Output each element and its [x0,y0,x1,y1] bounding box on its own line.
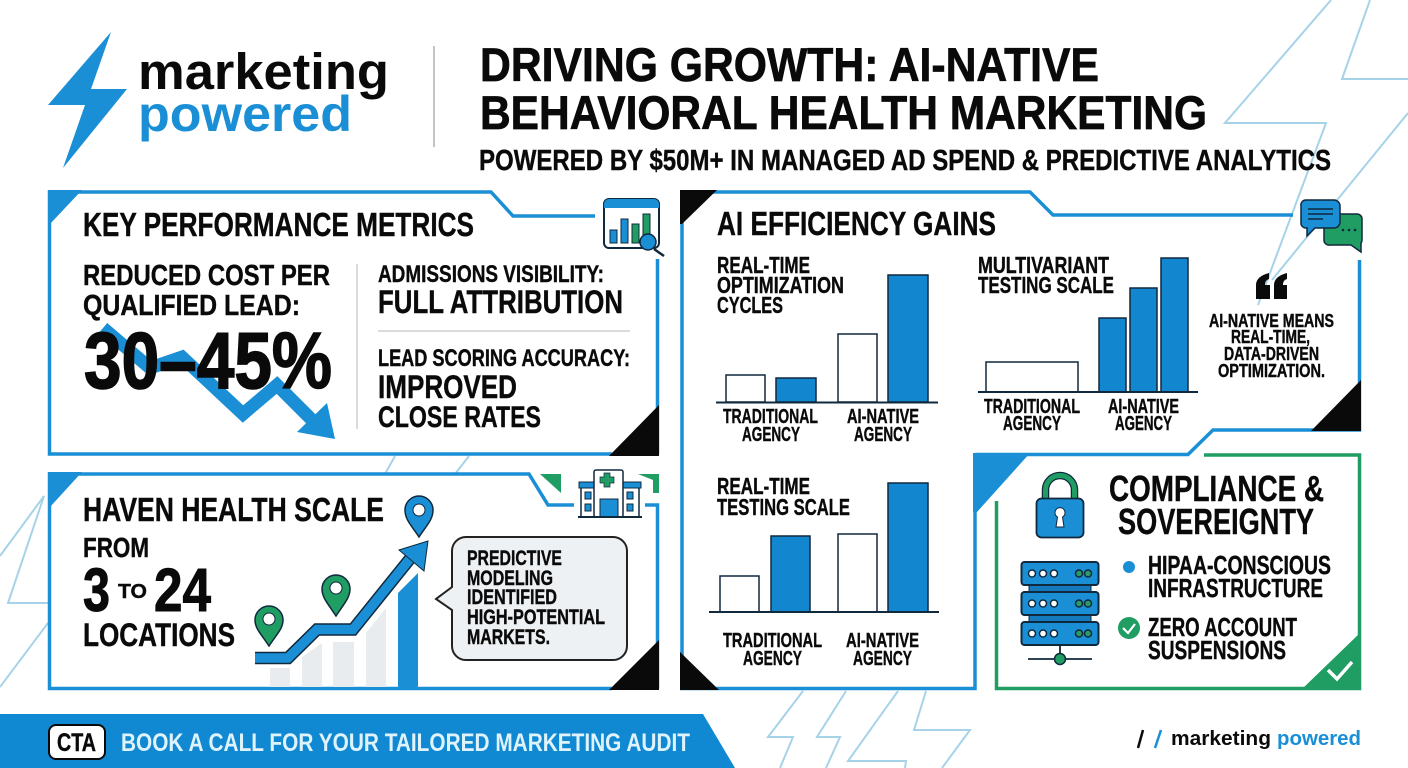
bullet: zero account suspensions: ZERO ACCOUNT [1148,612,1297,642]
chart: real-time testing scale: TESTING SCALE [717,494,850,520]
chart: multivariant testing scale: AGENCY [1115,413,1172,435]
bullet: hipaa-conscious infrastructure [1123,550,1331,603]
stat: from 3 to 24 locations: LOCATIONS [83,617,235,653]
chart: real-time optimization cycles: TRADITIONAL [723,406,818,428]
chart: multivariant testing scale: AI-NATIVE [1108,396,1179,418]
panel: key performance metrics [48,190,664,456]
big number: 30–45% [84,316,332,405]
panel: haven health scale [48,470,659,690]
stat: from 3 to 24 locations: TO [118,581,147,603]
cta badge [49,725,105,759]
chart: real-time optimization cycles: CYCLES [717,292,783,318]
heading: AI EFFICIENCY GAINS [717,205,996,242]
chart: real-time optimization cycles: REAL-TIME [717,252,810,278]
callout: predictive modeling [436,537,627,660]
heading: KEY PERFORMANCE METRICS [83,206,474,243]
icon: lightning bolt [48,32,127,168]
metric: lead scoring accuracy: LEAD SCORING ACCURACY: [378,345,630,372]
chart: real-time testing scale: TRADITIONAL [723,630,822,652]
chart: multivariant testing scale: TESTING SCALE [978,272,1114,298]
stat: from 3 to 24 locations: 24 [154,556,211,624]
chart: real-time testing scale: AI-NATIVE [846,630,919,652]
chart: real-time optimization cycles [716,252,938,446]
metric: admissions visibility [378,261,623,320]
metric: lead scoring accuracy [378,345,630,434]
chart: real-time testing scale: AGENCY [853,648,912,670]
cta badge: CTA [57,729,96,757]
logo [48,32,389,168]
growth chart [255,496,433,687]
chart: real-time optimization cycles: AGENCY [742,424,800,446]
heading: COMPLIANCE & [1109,468,1324,509]
callout: predictive modeling: IDENTIFIED [467,586,557,609]
bullet: hipaa-conscious infrastructure: INFRASTRUCTURE [1148,573,1323,603]
heading: SOVEREIGNTY [1118,501,1314,542]
metric label: reduced cost: REDUCED COST PER [83,260,330,292]
icon: hospital [578,470,642,517]
stat: from 3 to 24 locations: FROM [83,532,149,563]
metric label: reduced cost [83,260,330,322]
icon: server rack [1022,562,1098,664]
footer logo: powered [1277,728,1361,750]
heading [1109,468,1324,542]
heading: HAVEN HEALTH SCALE [83,491,384,528]
logo wordmark: powered: powered [138,86,352,142]
stat: from 3 to 24 locations [83,532,235,653]
icon: blue pin [405,496,433,537]
icon: quotation mark [1256,273,1287,299]
quote [1209,273,1334,381]
call to action bar [0,714,735,768]
icon: chat bubbles [1301,200,1362,252]
title: DRIVING GROWTH: AI-NATIVE [480,39,1099,92]
quote: REAL-TIME, [1231,327,1310,347]
title: BEHAVIORAL HEALTH MARKETING [480,87,1207,140]
chart: multivariant testing scale: AGENCY [1003,413,1061,435]
metric label: reduced cost: QUALIFIED LEAD: [83,290,300,322]
cta text: BOOK A CALL FOR YOUR TAILORED MARKETING AUDIT [121,729,690,757]
chart: real-time optimization cycles: OPTIMIZATION [717,272,844,298]
callout: predictive modeling: MARKETS. [467,626,550,649]
callout: predictive modeling: HIGH-POTENTIAL [467,606,605,629]
icon: padlock [1036,475,1084,538]
chart: real-time testing scale: REAL-TIME [717,473,810,499]
callout: predictive modeling: PREDICTIVE [467,547,562,570]
chart: multivariant testing scale: MULTIVARIANT [978,252,1109,278]
chart: multivariant testing scale [978,252,1198,435]
bullet: zero account suspensions [1118,612,1297,665]
quote: OPTIMIZATION. [1218,361,1325,381]
metric: admissions visibility: ADMISSIONS VISIBILITY: [378,261,604,288]
footer logo [1138,728,1361,750]
metric: lead scoring accuracy: IMPROVED [378,369,517,405]
chart: real-time testing scale: AGENCY [743,648,802,670]
bullet: hipaa-conscious infrastructure: HIPAA-CONSCIOUS [1148,550,1331,580]
panel: ai efficiency gains [680,190,1362,690]
chart: real-time testing scale [709,473,939,670]
chart: real-time optimization cycles: AI-NATIVE [847,406,919,428]
icon: green pin [322,575,350,616]
bullet: zero account suspensions: SUSPENSIONS [1148,635,1286,665]
metric: lead scoring accuracy: CLOSE RATES [378,401,541,434]
chart: real-time optimization cycles: AGENCY [854,424,912,446]
icon: green pin [255,606,283,646]
down trend arrow [103,328,335,439]
quote: AI-NATIVE MEANS [1209,311,1334,331]
panel: compliance and sovereignty [973,453,1361,690]
quote: DATA-DRIVEN [1224,344,1319,364]
chart: multivariant testing scale: TRADITIONAL [984,396,1080,418]
icon: analytics window [604,199,664,256]
title [480,39,1207,140]
logo wordmark: marketing: marketing [138,43,389,100]
callout: predictive modeling: MODELING [467,567,553,590]
stat: from 3 to 24 locations: 3 [83,556,110,624]
footer logo: marketing [1171,728,1271,750]
metric: admissions visibility: FULL ATTRIBUTION [378,284,623,320]
